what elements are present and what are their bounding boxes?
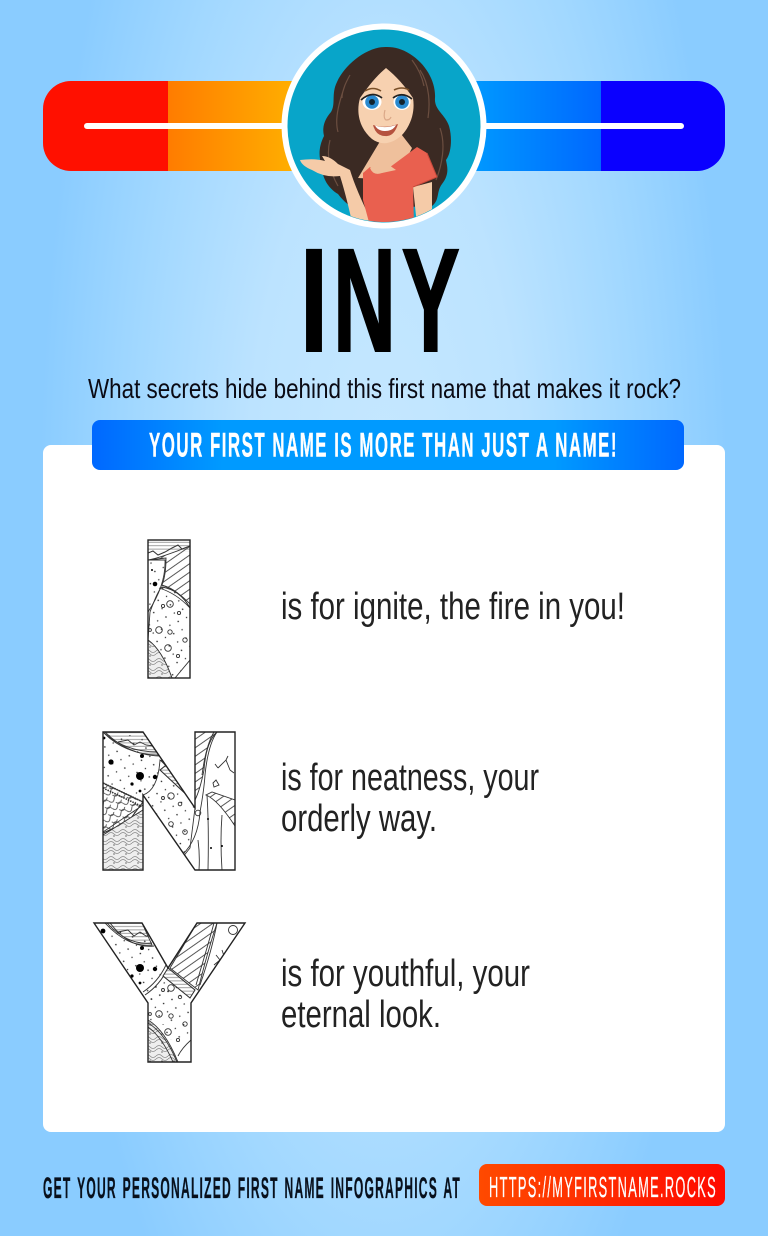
icon: doodle letter Y bbox=[94, 923, 245, 1062]
text: N lines: is for neatness, your bbox=[281, 757, 539, 799]
title bbox=[300, 219, 460, 383]
text: N lines: orderly way. bbox=[281, 798, 437, 840]
title: I bbox=[300, 219, 328, 383]
white content card bbox=[43, 445, 725, 1132]
text: N lines bbox=[281, 757, 539, 840]
icon: doodle letter I bbox=[148, 540, 190, 678]
blue heading ribbon bbox=[92, 420, 684, 470]
panel: letter N row bbox=[103, 732, 539, 870]
text: Y lines bbox=[281, 953, 530, 1036]
title: Y bbox=[402, 219, 460, 383]
title: N bbox=[333, 219, 396, 383]
text: I line: is for ignite, the fire in you! bbox=[281, 586, 625, 628]
footer url button bbox=[479, 1164, 725, 1206]
text: Y lines: eternal look. bbox=[281, 994, 441, 1036]
icon: doodle letter N bbox=[103, 732, 235, 870]
panel: letter Y row bbox=[94, 923, 530, 1062]
text: Y lines: is for youthful, your bbox=[281, 953, 530, 995]
avatar: cartoon woman in circle bbox=[282, 24, 486, 228]
panel: letter I row bbox=[148, 540, 625, 678]
top colour banner bbox=[43, 81, 725, 171]
